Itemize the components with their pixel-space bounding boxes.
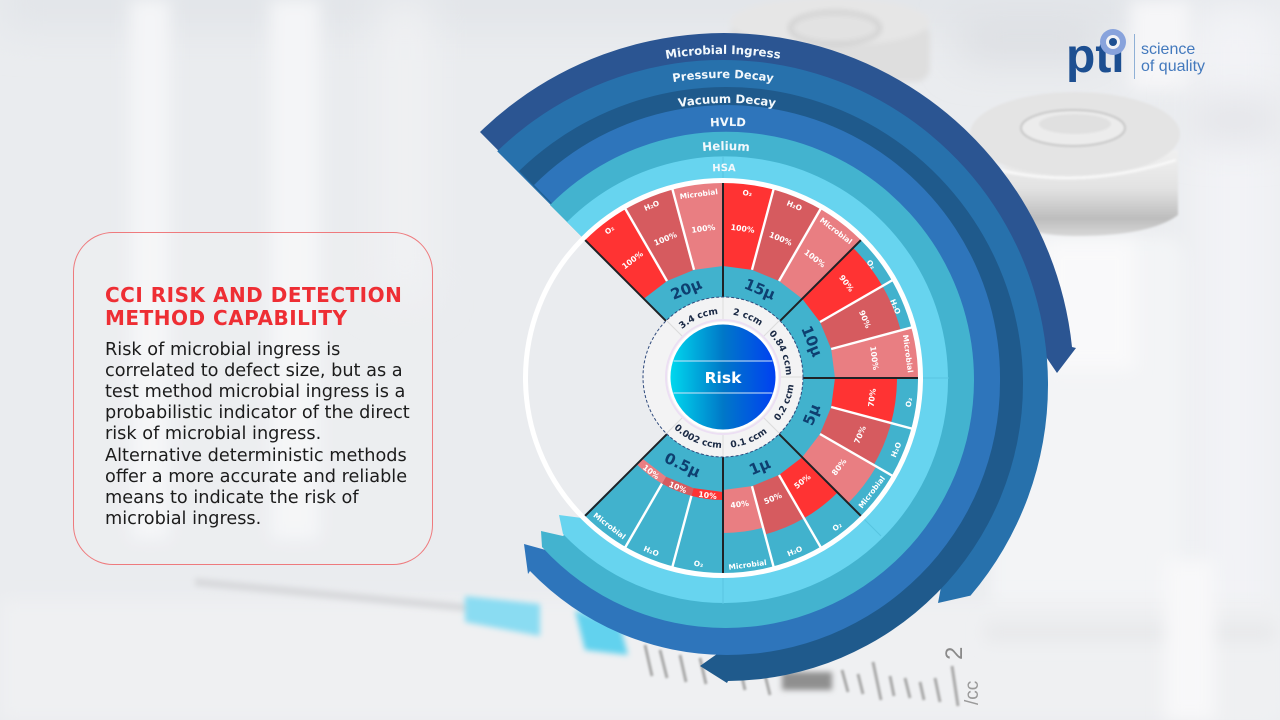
percentage labels: 100% <box>691 223 716 235</box>
percentage labels: 50% <box>763 491 783 506</box>
sector 1 micron bars <box>712 454 838 539</box>
O2 / H2O / Microbial labels: Microbial <box>592 511 627 541</box>
O2 / H2O / Microbial labels: Microbial <box>728 558 767 572</box>
background syringe: 2 <box>941 647 968 660</box>
arc arrow: Vacuum Decay <box>519 87 1023 683</box>
O2 / H2O / Microbial labels: Microbial <box>857 474 887 510</box>
background syringe <box>0 560 1280 720</box>
defect size labels: 10µ <box>797 323 826 359</box>
defect size labels <box>662 275 826 481</box>
O2 / H2O / Microbial labels: H₂O <box>785 199 803 213</box>
flow rate labels: 3.4 ccm <box>678 309 718 329</box>
Risk core circle: Risk <box>705 369 742 387</box>
sector 5 micron bars <box>794 378 897 506</box>
panel: description card <box>73 232 433 565</box>
method labels <box>666 44 780 172</box>
percentage labels: 100% <box>730 223 755 235</box>
flow rate ring <box>643 297 803 457</box>
arc arrow: Helium <box>541 132 974 628</box>
method labels: Microbial Ingress <box>666 44 780 59</box>
percentage labels: 90% <box>857 309 873 330</box>
defect size labels: 0.5µ <box>662 449 703 481</box>
O2 / H2O / Microbial labels <box>592 187 915 572</box>
sector base disc <box>584 182 919 574</box>
text block: description: means to indicate the risk of <box>105 488 359 508</box>
text block: description: Alternative deterministic methods <box>105 446 407 466</box>
percentage labels <box>620 223 880 510</box>
O2 / H2O / Microbial labels: H₂O <box>642 544 660 558</box>
sector 0.5 micron bars <box>635 458 723 500</box>
flow rate labels: 0.1 ccm <box>730 429 767 448</box>
O2 / H2O / Microbial labels: H₂O <box>643 199 661 213</box>
defect size labels: 1µ <box>746 454 773 479</box>
flow rate ring dividers <box>667 298 802 456</box>
percentage labels: 10% <box>667 480 688 495</box>
method labels: Helium <box>702 141 749 152</box>
arc arrow: HSA <box>559 156 948 603</box>
text block: description: microbial ingress. <box>105 509 261 529</box>
background vial behind chart <box>730 0 930 82</box>
heading: METHOD CAPABILITY <box>105 306 347 330</box>
flow rate labels <box>675 308 794 448</box>
O2 / H2O / Microbial labels: O₂ <box>831 520 844 533</box>
white sub-sector dividers <box>625 189 912 567</box>
percentage labels: 10% <box>698 490 718 501</box>
flow rate labels: 0.84 ccm <box>770 330 792 375</box>
sector 20 micron bars <box>584 176 744 302</box>
percentage labels: 100% <box>620 249 645 271</box>
O2 / H2O / Microbial labels: H₂O <box>786 544 804 558</box>
percentage labels: 40% <box>730 499 750 510</box>
faint dividers in HSA ring <box>723 156 949 604</box>
O2 / H2O / Microbial labels: Microbial <box>679 187 718 201</box>
defect size labels: 5µ <box>799 401 824 428</box>
logo: pti science of quality: science <box>1141 41 1195 58</box>
background vial in foreground <box>970 92 1185 625</box>
O2 / H2O / Microbial labels: O₂ <box>904 397 914 408</box>
arc arrow: Pressure Decay <box>497 60 1048 603</box>
percentage labels: 80% <box>830 457 849 477</box>
percentage labels: 100% <box>802 248 827 270</box>
text block: description: test method microbial ingress is a <box>105 382 405 402</box>
logo: pti science of quality: pti <box>1066 30 1125 83</box>
text block: description: offer a more accurate and reliable <box>105 467 407 487</box>
O2 / H2O / Microbial labels: H₂O <box>889 441 903 459</box>
O2 / H2O / Microbial labels: O₂ <box>603 224 616 237</box>
Risk core circle <box>666 320 780 434</box>
flow rate labels: 0.2 ccm <box>774 384 794 420</box>
method labels: HVLD <box>710 118 746 126</box>
arc arrow: HVLD <box>524 105 1000 655</box>
logo: pti science of quality: of quality <box>1141 58 1205 75</box>
flow rate labels: 2 ccm <box>733 308 762 326</box>
percentage labels: 50% <box>792 472 813 491</box>
arc arrow: Microbial Ingress <box>480 33 1076 378</box>
percentage labels: 100% <box>768 230 794 248</box>
method labels: Pressure Decay <box>672 70 774 84</box>
percentage labels: 100% <box>653 230 678 248</box>
text block: description: correlated to defect size, but as a <box>105 361 403 381</box>
background syringe: /cc <box>962 681 983 705</box>
O2 / H2O / Microbial labels: O₂ <box>864 258 877 271</box>
defect size labels: 15µ <box>742 275 778 304</box>
text block: description: Risk of microbial ingress is <box>105 340 340 360</box>
sector 15 micron bars <box>723 182 865 310</box>
black sector dividers <box>584 181 920 575</box>
text block: description <box>105 340 410 529</box>
white ring <box>526 180 920 576</box>
sector 10 micron bars <box>799 248 925 399</box>
percentage labels: 70% <box>867 388 878 407</box>
percentage labels: 90% <box>837 273 856 294</box>
O2 / H2O / Microbial labels: Microbial <box>818 216 854 246</box>
O2 / H2O / Microbial labels: O₂ <box>693 559 704 569</box>
text block: description: risk of microbial ingress. <box>105 424 321 444</box>
text block: description: probabilistic indicator of the direct <box>105 403 410 423</box>
method labels: Vacuum Decay <box>678 94 776 109</box>
heading: CCI RISK AND DETECTION <box>105 283 402 307</box>
O2 / H2O / Microbial labels: O₂ <box>742 188 753 198</box>
method labels: HSA <box>713 164 736 172</box>
percentage labels: 70% <box>852 424 868 445</box>
O2 / H2O / Microbial labels: Microbial <box>901 334 915 373</box>
defect size labels: 20µ <box>668 275 704 304</box>
percentage labels: 10% <box>641 463 661 481</box>
heading <box>105 283 402 330</box>
O2 / H2O / Microbial labels: H₂O <box>888 298 902 316</box>
percentage labels: 100% <box>868 346 880 371</box>
flow rate labels: 0.002 ccm <box>675 424 722 448</box>
